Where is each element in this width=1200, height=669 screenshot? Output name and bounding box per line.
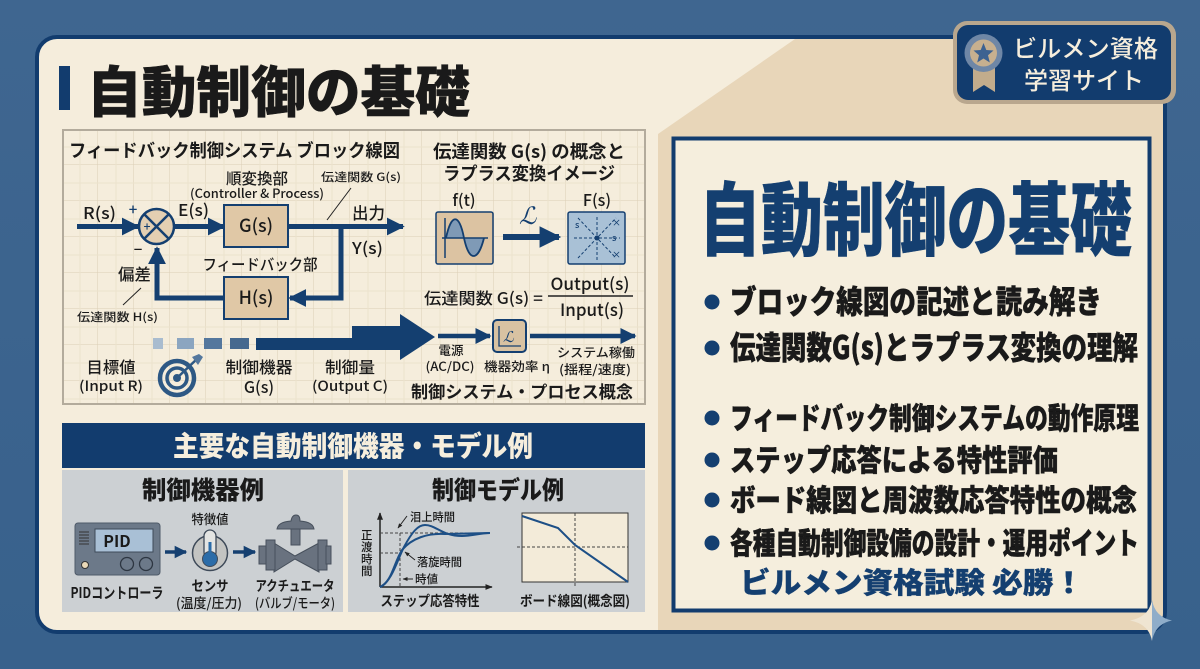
learning points list: ブロック線図の記述と読み解き — [730, 277, 1102, 323]
system flow labels: (AC/DC) — [426, 356, 474, 375]
equipment labels: センサ — [192, 576, 228, 596]
block: G(s): G(s) — [239, 212, 273, 238]
system flow labels: 電源 — [438, 340, 464, 359]
signal labels: フィードバック部 — [202, 253, 318, 275]
arrow — [165, 550, 186, 554]
chart: step response: 落旋時間 — [417, 554, 462, 570]
chart: F(s) s-plane: × — [612, 216, 621, 229]
transfer function heading: ラプラス変換イメージ — [443, 160, 615, 186]
process flow arrow — [153, 314, 435, 360]
system flow labels: (揺程/速度) — [559, 359, 631, 378]
panel: summary — [674, 138, 1150, 610]
block: G(s) — [224, 205, 288, 247]
equipment labels: PIDコントローラ — [70, 582, 164, 603]
chart: step response: 間 — [361, 563, 372, 579]
signal labels — [77, 197, 385, 325]
exam slogan: ビルメン資格試験 必勝！ — [740, 560, 1084, 602]
equipment labels: (バルブ/モータ) — [255, 592, 335, 612]
page heading: 自動制御の基礎 — [87, 48, 470, 128]
transfer function formula: Output(s) — [550, 270, 630, 295]
forward block labels: 順変換部 — [226, 167, 288, 189]
chart: step response: 泪上時間 — [410, 509, 455, 525]
process labels — [79, 354, 388, 398]
chart: F(s) s-plane — [568, 187, 625, 264]
icon: target — [160, 354, 203, 395]
chart: F(s) s-plane: × — [612, 248, 621, 261]
section header: 主要な自動制御機器・モデル例 — [173, 425, 533, 465]
chart: bode plot — [517, 513, 630, 611]
badge: site name: 学習サイト — [1024, 61, 1144, 96]
panel: control equipment and model examples — [62, 423, 645, 612]
system flow — [438, 320, 635, 352]
system flow labels: 機器効率 η — [484, 356, 550, 375]
sub-panel: control equipment — [62, 470, 343, 612]
icon: PID controller: PID — [103, 528, 131, 552]
chart: step response — [361, 509, 492, 611]
signal labels: − — [134, 239, 142, 260]
signal labels: 偏差 — [118, 261, 151, 285]
signal labels: E(s) — [178, 197, 209, 221]
process labels: 制御機器 — [226, 354, 292, 378]
signal flow arrows — [77, 226, 403, 298]
chart: step response: 時 — [361, 551, 373, 567]
badge text: ビルメン資格 — [1013, 29, 1158, 64]
transfer function heading — [433, 138, 625, 186]
icon: sensor thermometer — [192, 530, 228, 570]
chart: f(t) time signal — [436, 187, 493, 264]
transfer function formula: Input(s) — [560, 296, 624, 321]
chart: step response: 正 — [361, 527, 372, 543]
chart: F(s) s-plane: F(s) — [583, 187, 611, 211]
equipment labels: (温度/圧力) — [176, 592, 242, 612]
chart: bode plot: ボード線図(概念図) — [520, 591, 630, 611]
icon: valve — [259, 515, 331, 572]
summing junction — [139, 209, 174, 244]
signal labels: + — [129, 199, 137, 220]
sub-heading: 制御モデル例 — [432, 471, 564, 507]
chart: F(s) s-plane: s — [612, 231, 616, 244]
laplace arrow: ℒ — [519, 202, 537, 230]
forward block labels: (Controller & Process) — [190, 183, 324, 202]
forward block labels — [190, 167, 401, 220]
laplace arrow — [503, 202, 559, 237]
signal labels: 伝達関数 H(s) — [77, 309, 158, 325]
transfer function heading: 伝達関数 G(s) の概念と — [433, 138, 625, 164]
icon: PID controller — [75, 523, 160, 575]
chart: step response: ステップ応答特性 — [380, 591, 480, 611]
sub-panel: control models — [348, 470, 645, 612]
system flow labels — [426, 340, 635, 378]
chart: F(s) s-plane: s — [575, 218, 579, 231]
panel: block diagram and transfer function — [63, 130, 645, 404]
section header — [62, 423, 645, 468]
chart: step response: 時値 — [415, 571, 438, 587]
process labels: G(s) — [244, 374, 274, 398]
badge: site name — [953, 21, 1176, 104]
process labels: 目標値 — [86, 354, 136, 378]
signal labels: Y(s) — [351, 235, 383, 259]
equipment labels — [70, 509, 335, 612]
signal labels: 出力 — [352, 200, 385, 224]
chart: step response: 渡 — [361, 539, 373, 555]
transfer function formula: 伝達関数 G(s) = — [424, 285, 543, 309]
process labels: (Input R) — [79, 376, 143, 396]
chart: f(t) time signal: f(t) — [452, 187, 476, 211]
icon: medal — [964, 34, 1002, 92]
equipment labels: アクチュエータ — [256, 576, 334, 596]
learning points list — [704, 277, 1139, 563]
learning points list: ステップ応答による特性評価 — [730, 436, 1058, 480]
equipment labels: 特徴値 — [192, 509, 228, 528]
signal labels: R(s) — [83, 200, 116, 224]
summing junction: + — [144, 218, 151, 235]
block: H(s) — [224, 277, 288, 319]
process labels: (Output C) — [312, 376, 388, 396]
transfer function formula — [424, 270, 633, 321]
block diagram heading: フィードバック制御システム ブロック線図 — [69, 137, 400, 163]
process concept caption: 制御システム・プロセス概念 — [411, 378, 633, 403]
arrow — [233, 550, 255, 554]
block: H(s): H(s) — [239, 284, 273, 310]
sub-heading: 制御機器例 — [142, 471, 264, 507]
system flow labels: システム稼働 — [557, 342, 635, 361]
learning points list: ボード線図と周波数応答特性の概念 — [730, 476, 1137, 520]
forward block labels: 伝達関数 G(s) — [321, 169, 401, 185]
process labels: 制御量 — [325, 354, 375, 378]
icon: sparkle — [1130, 600, 1172, 641]
system flow: ℒ — [503, 328, 515, 346]
